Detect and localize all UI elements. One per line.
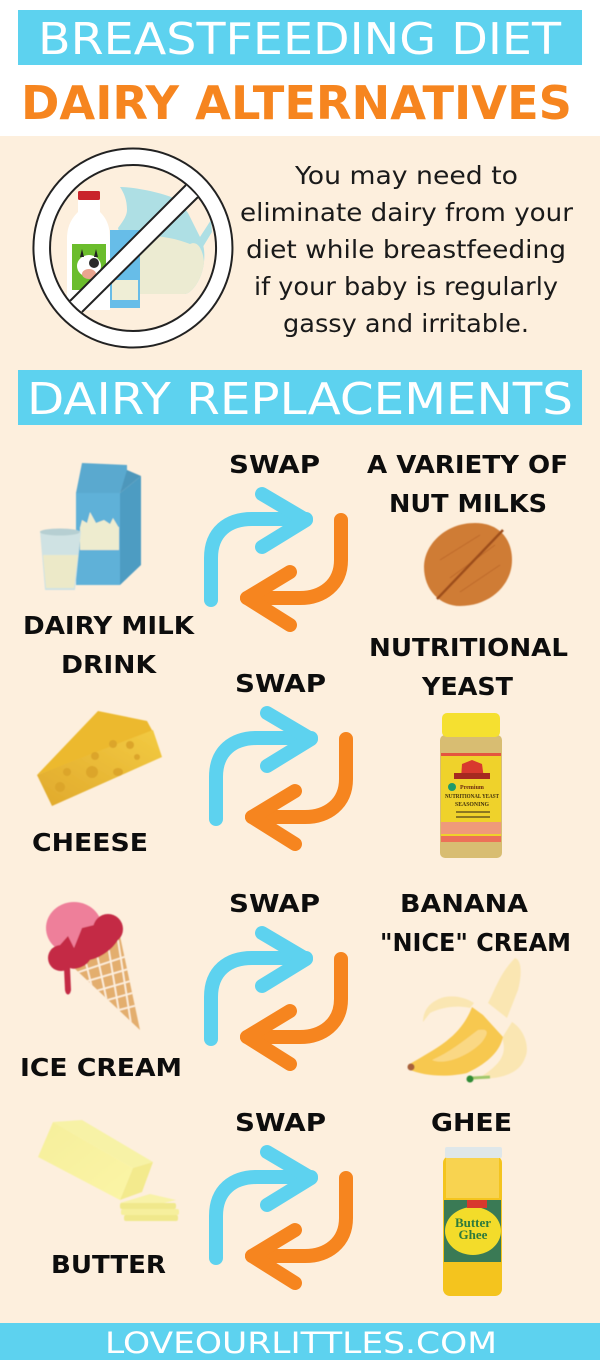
- label: banana nice cream: BANANA: [400, 889, 529, 918]
- title banner: breastfeeding diet: BREASTFEEDING DIET: [38, 14, 561, 65]
- label: swap 2: SWAP: [235, 669, 326, 698]
- intro text: diet while breastfeeding: [246, 235, 566, 264]
- icon: no dairy sign: [33, 148, 232, 348]
- section banner: dairy replacements: DAIRY REPLACEMENTS: [27, 374, 573, 425]
- icon: ghee jar: [443, 1147, 502, 1296]
- subtitle: dairy alternatives: DAIRY ALTERNATIVES: [21, 76, 572, 130]
- label: a variety of nut milks: A VARIETY OF: [367, 450, 568, 479]
- label: cheese: CHEESE: [32, 828, 148, 857]
- label: swap 1: SWAP: [229, 450, 320, 479]
- icon: walnut: [424, 523, 512, 606]
- footer banner: website: [0, 1323, 600, 1360]
- icon: ghee jar: Butter: [455, 1215, 491, 1230]
- icon: ice cream cone: [46, 902, 140, 1030]
- label: nutritional yeast: NUTRITIONAL: [369, 633, 568, 662]
- intro text: eliminate dairy from your: [240, 198, 574, 227]
- icon: peeled banana: [408, 958, 527, 1082]
- label: ghee: GHEE: [431, 1108, 512, 1137]
- label: swap 3: SWAP: [229, 889, 320, 918]
- label: swap 4: SWAP: [235, 1108, 326, 1137]
- label: butter: BUTTER: [51, 1250, 166, 1279]
- label: ice cream: ICE CREAM: [20, 1053, 182, 1082]
- arrows: swap 4: [216, 1152, 346, 1283]
- icon: milk carton and glass: [40, 463, 141, 590]
- label: nutritional yeast: [369, 633, 568, 701]
- icon: nutritional yeast jar: Premium: [460, 785, 484, 791]
- icon: nutritional yeast jar: SEASONING: [455, 801, 489, 808]
- label: a variety of nut milks: [367, 450, 568, 518]
- label: a variety of nut milks: NUT MILKS: [389, 489, 547, 518]
- icon: butter block and slices: [38, 1120, 179, 1221]
- intro text: [240, 161, 574, 338]
- label: nutritional yeast: YEAST: [421, 672, 513, 701]
- label: banana nice cream: "NICE" CREAM: [380, 928, 571, 957]
- label: dairy milk drink: DAIRY MILK: [23, 611, 196, 640]
- icon: cheese wedge: [37, 711, 162, 806]
- arrows: swap 2: [216, 713, 346, 844]
- icon: ghee jar: Ghee: [459, 1227, 488, 1242]
- icon: nutritional yeast jar: NUTRITIONAL YEAST: [445, 793, 500, 800]
- icon: nutritional yeast jar: [440, 713, 502, 858]
- intro text: if your baby is regularly: [254, 272, 558, 301]
- intro text: You may need to: [294, 161, 518, 190]
- arrows: swap 1: [211, 494, 341, 625]
- arrows: swap 3: [211, 933, 341, 1064]
- label: banana nice cream: [380, 889, 571, 957]
- intro text: gassy and irritable.: [283, 309, 529, 338]
- footer banner: website: LOVEOURLITTLES.COM: [105, 1326, 497, 1360]
- label: dairy milk drink: DRINK: [61, 650, 158, 679]
- label: dairy milk drink: [23, 611, 196, 679]
